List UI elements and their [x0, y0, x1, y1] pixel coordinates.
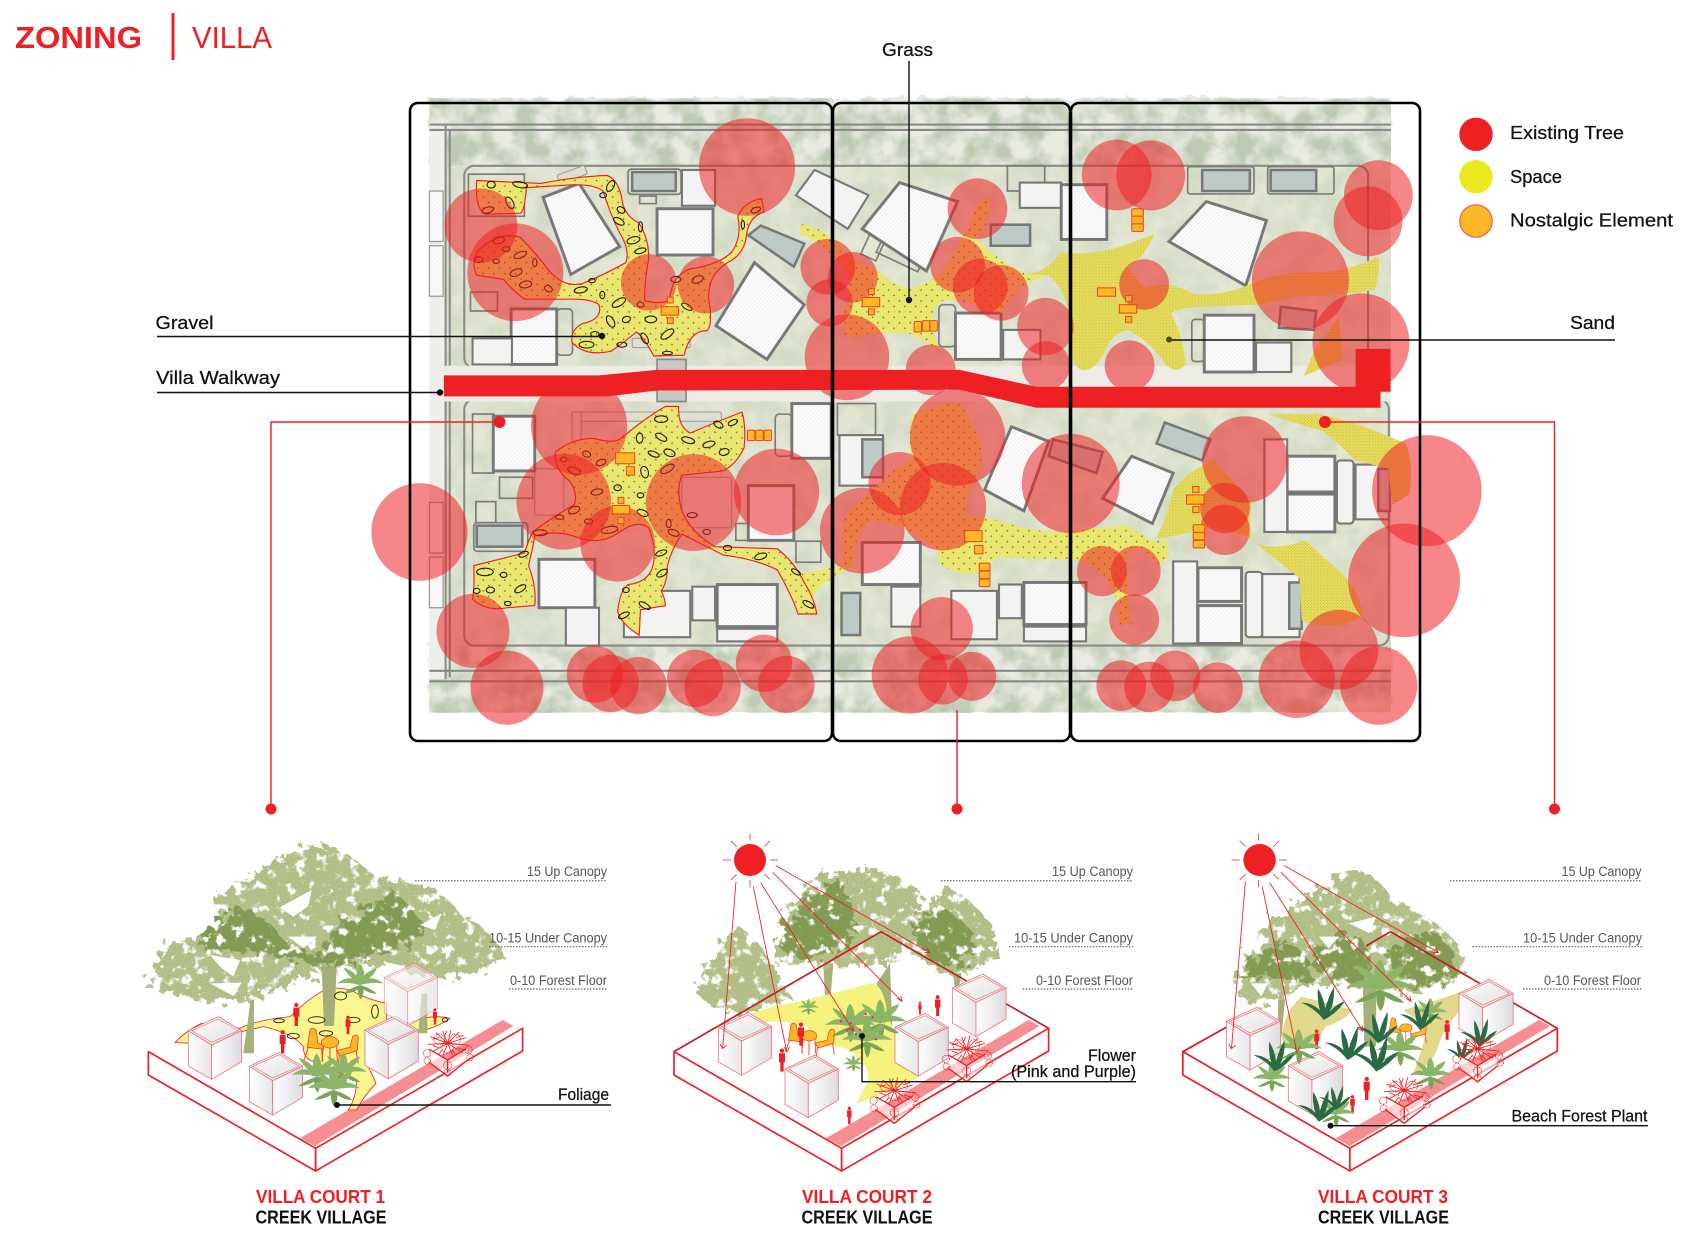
- sun and light arrows: [1229, 833, 1438, 1052]
- callout: Foliage: [334, 1085, 611, 1108]
- court 1 caption: CREEK VILLAGE: [256, 1206, 386, 1228]
- existing tree circles, courts 1 and 2: [371, 118, 956, 725]
- legend item: nostalgic element: Nostalgic Element: [1510, 210, 1673, 231]
- slab: [1183, 932, 1557, 1171]
- callout: Gravel: [156, 312, 605, 339]
- canopy level labels, court 2: 10-15 Under Canopy: [1014, 930, 1133, 946]
- slab: [148, 932, 523, 1171]
- people: [280, 1003, 437, 1053]
- ovals on gravel: [274, 992, 448, 1039]
- canopy level labels, court 1: 15 Up Canopy: [527, 864, 607, 879]
- callout: Grass: Grass: [882, 39, 933, 60]
- callout: Flower: Flower: [1088, 1046, 1136, 1065]
- callout: Beach Forest Plant: [1328, 1106, 1648, 1129]
- planter: [423, 1030, 473, 1076]
- plan buildings, courts 2 and 3: [862, 167, 1390, 643]
- callout: Villa Walkway: [156, 367, 443, 396]
- plan base drawing: ground, foliage, roads: [429, 98, 1391, 713]
- callout: Sand: [1166, 312, 1615, 342]
- callout: Foliage: Foliage: [558, 1085, 609, 1104]
- diagram: villa court 3: [1183, 833, 1557, 1171]
- palm: [1346, 959, 1414, 1011]
- walkway strip: [300, 1020, 513, 1146]
- callout: Gravel: Gravel: [156, 312, 214, 333]
- slab back edges: [674, 932, 1049, 1052]
- canopy level labels, court 3: [1450, 864, 1642, 989]
- sun and light arrows: [720, 833, 930, 1052]
- planters: [870, 1036, 992, 1123]
- connector: court 2 to diagram: [952, 710, 962, 814]
- court 2 caption: [802, 1186, 932, 1228]
- legend: [1459, 118, 1673, 237]
- tree canopy: [145, 843, 503, 1053]
- callout: Grass: [882, 39, 933, 303]
- foliage plants: [292, 1052, 367, 1107]
- legend item: space: [1459, 160, 1562, 193]
- court 1 caption: VILLA COURT 1: [256, 1186, 385, 1207]
- court frames: [410, 103, 1420, 741]
- sand paths: [1282, 992, 1461, 1073]
- slab: [674, 932, 1049, 1171]
- court 2 caption: CREEK VILLAGE: [802, 1206, 932, 1228]
- connector: court 1 to diagram: [266, 416, 506, 814]
- callout: Villa Walkway: Villa Walkway: [156, 367, 281, 388]
- court 1 caption: [256, 1186, 386, 1228]
- legend item: existing tree: Existing Tree: [1510, 122, 1624, 143]
- legend item: nostalgic element: [1460, 205, 1673, 237]
- canopy level labels, court 3: 15 Up Canopy: [1562, 864, 1642, 879]
- walkway strip: [826, 1020, 1039, 1146]
- existing tree circles, courts 2 and 3: [820, 140, 1482, 725]
- canopy level labels, court 2: [941, 864, 1133, 989]
- slab back edges: [1183, 932, 1557, 1052]
- trees: [697, 867, 997, 1028]
- table and chairs: [786, 1023, 834, 1056]
- title: [15, 13, 272, 60]
- title: ZONING: [15, 20, 142, 55]
- canopy level labels, court 2: 15 Up Canopy: [1052, 864, 1133, 879]
- callout: Beach Forest Plant: Beach Forest Plant: [1512, 1106, 1648, 1126]
- plan gravel zones with red outline: [473, 175, 817, 635]
- court 2 caption: VILLA COURT 2: [802, 1186, 932, 1207]
- canopy level labels, court 1: 0-10 Forest Floor: [510, 973, 607, 988]
- canopy level labels, court 3: 10-15 Under Canopy: [1523, 930, 1642, 946]
- flowering plants: [798, 999, 907, 1072]
- planters: [1380, 1036, 1504, 1123]
- court 3 caption: CREEK VILLAGE: [1318, 1206, 1449, 1228]
- cubes: [718, 974, 1006, 1118]
- court 3 caption: [1318, 1186, 1449, 1228]
- canopy level labels, court 3: 0-10 Forest Floor: [1544, 973, 1641, 988]
- trees: [1238, 870, 1463, 1047]
- villa walkway band: [444, 349, 1390, 408]
- yellow gravel path: [175, 988, 450, 1110]
- cubes: [188, 963, 438, 1115]
- table and chairs: [304, 1028, 358, 1065]
- diagram: villa court 2: [674, 833, 1049, 1171]
- legend item: space: Space: [1510, 166, 1562, 187]
- legend item: existing tree: [1459, 118, 1624, 151]
- yellow zone: [723, 983, 920, 1103]
- gravel stepping ovals: [473, 179, 815, 620]
- court 3 caption: VILLA COURT 3: [1318, 1186, 1448, 1207]
- table and chairs: [1387, 1018, 1426, 1044]
- people: [1314, 1020, 1450, 1112]
- connector: court 3 to diagram: [1319, 416, 1560, 814]
- canopy level labels, court 1: [415, 864, 607, 989]
- people: [779, 995, 940, 1124]
- callout: Sand: Sand: [1570, 312, 1615, 333]
- canopy level labels, court 1: 10-15 Under Canopy: [489, 930, 607, 946]
- diagram: villa court 1: [145, 843, 523, 1171]
- plan buildings, courts 1 and 2: [468, 166, 1045, 646]
- fern behind: [337, 964, 383, 1000]
- title: VILLA: [192, 20, 272, 55]
- beach forest plants: [1253, 987, 1497, 1127]
- callout: Flower: (Pink and Purple): [1011, 1062, 1136, 1081]
- canopy level labels, court 2: 0-10 Forest Floor: [1036, 973, 1133, 988]
- callout: Flower: [859, 1033, 1136, 1082]
- site plan: [371, 98, 1482, 741]
- cubes: [1226, 979, 1513, 1114]
- plan sand and grass zones: [800, 199, 1411, 626]
- nostalgic element markers: [612, 209, 1205, 587]
- walkway strip: [1336, 1020, 1550, 1146]
